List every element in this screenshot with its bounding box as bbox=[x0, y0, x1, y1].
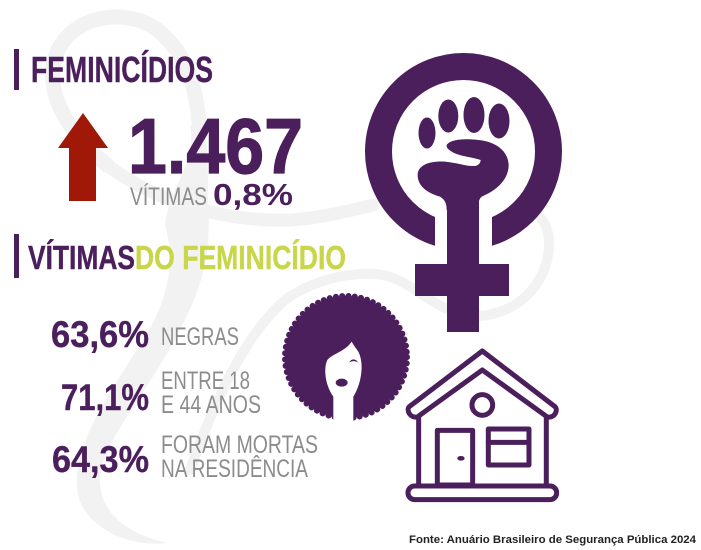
icon: red up arrow bbox=[58, 113, 108, 201]
heading: vítimas do feminicídio: VÍTIMAS bbox=[28, 239, 135, 276]
victims label and percentage change: VÍTIMAS bbox=[130, 182, 207, 211]
victims label and percentage change: 0,8% bbox=[213, 177, 293, 212]
victims label and percentage change bbox=[130, 177, 293, 212]
stat: entre 18 e 44 anos bbox=[61, 367, 261, 419]
stat: entre 18 e 44 anos: 71,1% bbox=[61, 377, 149, 418]
icon: woman with afro hair bbox=[285, 296, 407, 428]
stat: foram mortas na residência: FORAM MORTAS bbox=[161, 431, 318, 459]
stat: entre 18 e 44 anos: ENTRE 18 bbox=[161, 367, 250, 395]
stat: foram mortas na residência: NA RESIDÊNCIA bbox=[161, 454, 308, 483]
stat: entre 18 e 44 anos: E 44 ANOS bbox=[161, 391, 261, 419]
background swirl ribbons bbox=[53, 17, 549, 544]
total victims number: 1.467 bbox=[128, 102, 303, 190]
source note: Fonte: Anuário Brasileiro de Segurança Pública 2024 bbox=[409, 534, 697, 546]
icon: venus symbol with raised fist bbox=[378, 66, 548, 332]
stat: negras: NEGRAS bbox=[161, 323, 239, 351]
icon: house bbox=[408, 351, 557, 500]
stat: negras bbox=[51, 314, 239, 355]
heading: feminicídios: FEMINICÍDIOS bbox=[31, 49, 213, 90]
heading: vítimas do feminicídio: DO FEMINICÍDIO bbox=[135, 239, 346, 276]
stat: foram mortas na residência bbox=[52, 431, 318, 483]
stat: negras: 63,6% bbox=[51, 314, 149, 355]
heading: feminicídios bbox=[14, 49, 213, 90]
heading: vítimas do feminicídio bbox=[14, 234, 346, 278]
stat: foram mortas na residência: 64,3% bbox=[52, 439, 149, 480]
